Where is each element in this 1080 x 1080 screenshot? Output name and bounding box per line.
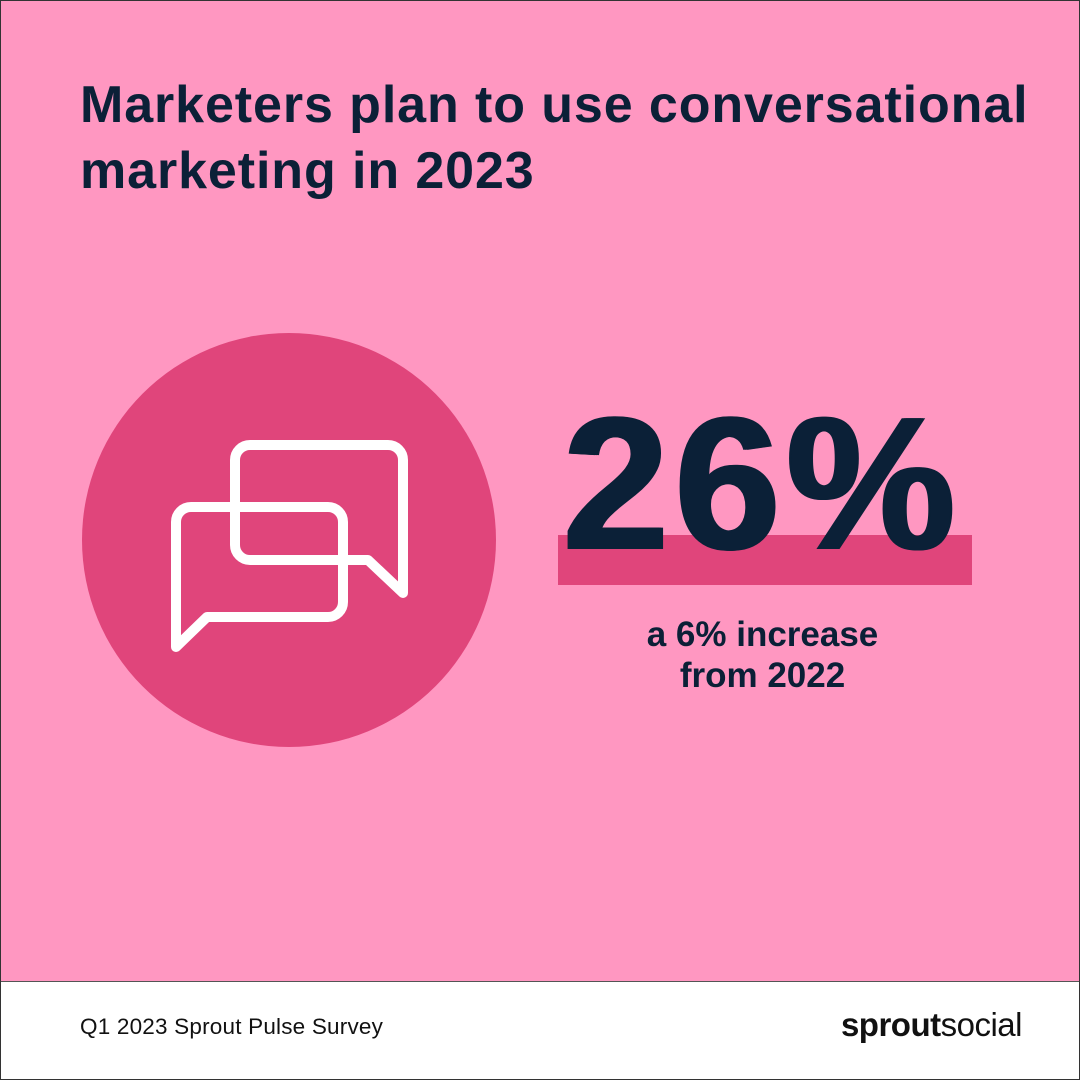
title: marketing in 2023: [80, 142, 535, 200]
big stat: 26%: [563, 378, 961, 590]
highlight bar: [558, 535, 972, 585]
title: [80, 76, 1028, 200]
icon circle: [82, 333, 496, 747]
stat caption: from 2022: [680, 656, 845, 695]
logo: sproutsocial: [841, 1006, 1022, 1043]
title: Marketers plan to use conversational: [80, 76, 1028, 134]
stat caption: a 6% increase: [647, 615, 878, 654]
footer source: Q1 2023 Sprout Pulse Survey: [80, 1014, 383, 1039]
stat caption: [647, 615, 878, 695]
